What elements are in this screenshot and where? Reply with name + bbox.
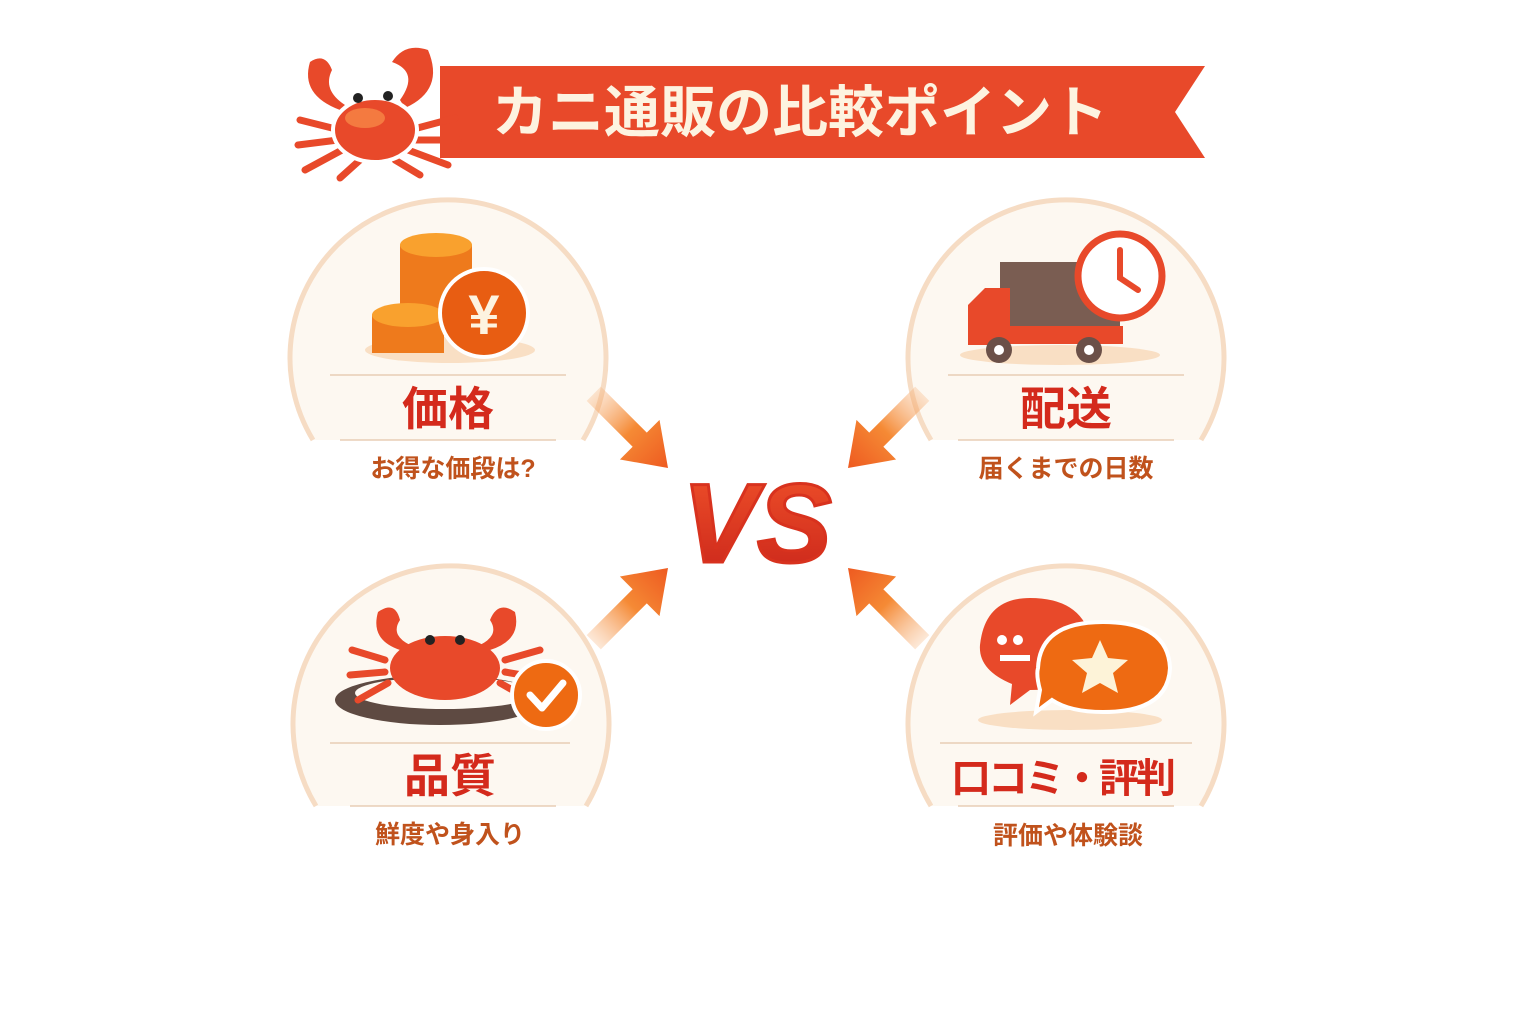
panel: reviews [908,566,1224,850]
title banner [440,66,1205,158]
heading: price: 価格 [402,383,494,435]
arrow: price to VS [574,374,688,488]
heading: reviews: 口コミ・評判 [951,757,1174,801]
icon: truck with clock [960,234,1162,365]
arrow: quality to VS [574,548,688,662]
icon: coins with yen [365,233,535,363]
VS text: VS [682,461,832,586]
heading: delivery: 配送 [1020,383,1112,435]
panel: delivery [908,200,1224,483]
heading: quality: 品質 [404,750,496,802]
subtitle: quality: 鮮度や身入り [375,821,525,849]
arrow: reviews to VS [828,548,942,662]
subtitle: delivery: 届くまでの日数 [978,455,1154,483]
arrow: delivery to VS [828,374,942,488]
panel: price [290,200,606,483]
icon: crab on plate with check [335,608,580,729]
panel: quality [293,566,609,849]
subtitle: price: お得な価段は? [370,455,536,483]
title text: カニ通販の比較ポイント [492,81,1108,144]
icon: speech bubbles with star [978,598,1170,730]
icon: title crab [298,48,458,178]
icon: coins with yen: ¥ [468,283,500,346]
subtitle: reviews: 評価や体験談 [993,822,1143,850]
